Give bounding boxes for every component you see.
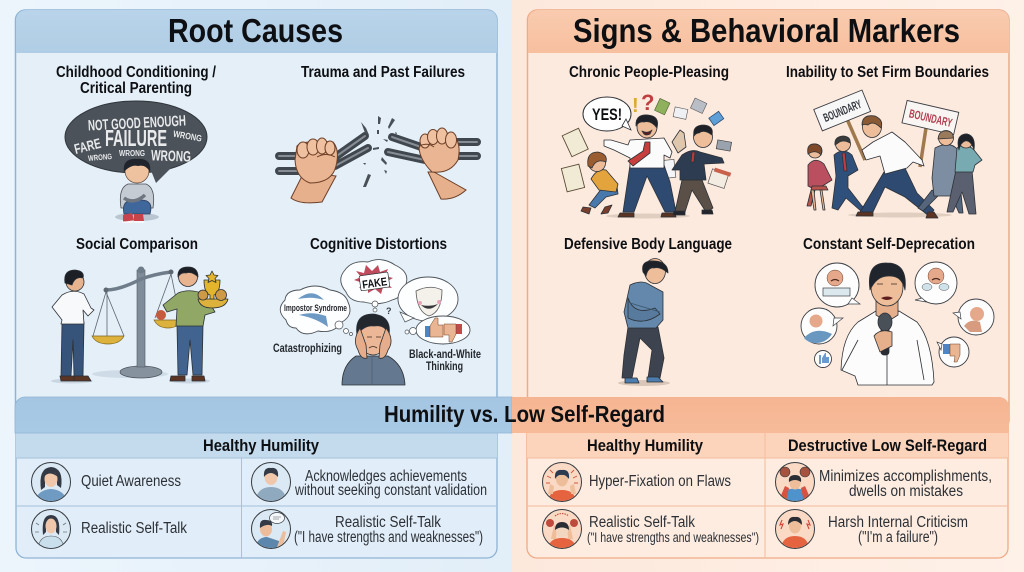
- icon: stressed man: [542, 462, 582, 502]
- speech bubble: yes: [583, 97, 631, 131]
- label: black-and-white thinking: Thinking: [426, 359, 463, 373]
- icon: dark speech bubble of negative words: WRONG: [119, 149, 145, 158]
- label: catastrophizing: Catastrophizing: [273, 341, 342, 355]
- icon: man calm: [252, 462, 290, 502]
- text: minimizes accomplishments: dwells on mistakes: [849, 483, 963, 500]
- block: chronic people-pleasing: [561, 64, 732, 218]
- main man pushing signs: [848, 116, 952, 218]
- speech bubbles with faces: [801, 262, 994, 368]
- icon: hunched man with crossed arms: [618, 258, 670, 386]
- icon: distressed person holding head: [542, 510, 582, 549]
- column heading: destructive low self-regard: Destructive Low Self-Regard: [788, 436, 987, 455]
- text: realistic self-talk peach: [587, 514, 759, 545]
- sign: boundary right: [902, 100, 959, 167]
- left fist: [291, 138, 337, 203]
- icon: person under dark clouds: [776, 462, 814, 502]
- sign: boundary left: BOUNDARY: [821, 97, 864, 125]
- signs header band: [528, 10, 1009, 53]
- man in blue suit: [832, 136, 868, 212]
- flying papers and symbols: [561, 90, 732, 192]
- sign: boundary right: BOUNDARY: [908, 106, 954, 130]
- text: realistic self-talk peach: Realistic Self-Talk: [589, 514, 695, 531]
- text: hyper-fixation on flaws: Hyper-Fixation on Flaws: [589, 473, 731, 490]
- subheading: childhood conditioning: [56, 64, 216, 97]
- icon: man with speech bubble: [252, 510, 290, 549]
- subheading: trauma: Trauma and Past Failures: [301, 64, 465, 81]
- block: defensive body language: [564, 236, 732, 386]
- text: harsh internal criticism: ("I'm a failure"): [858, 529, 938, 546]
- row: minimizes accomplishments: [776, 462, 992, 502]
- subheading: cognitive distortions: Cognitive Distortions: [310, 236, 447, 253]
- icon: man with trophy: [163, 267, 228, 384]
- subheading: inability to set firm boundaries: Inability to Set Firm Boundaries: [786, 64, 989, 81]
- root causes header band: [16, 10, 497, 53]
- heading: humility vs low self-regard: Humility vs. Low Self-Regard: [384, 401, 665, 427]
- row: hyper-fixation on flaws: [542, 462, 731, 502]
- block: childhood conditioning: [56, 64, 216, 222]
- text: harsh internal criticism: [828, 514, 968, 546]
- subheading: childhood conditioning: Critical Parenting: [80, 80, 192, 97]
- comparison table: humility vs low self-regard: [15, 397, 1009, 558]
- sign: boundary left: [814, 90, 871, 160]
- thought cloud: fake: FAKE: [362, 276, 388, 292]
- icon: dark speech bubble of negative words: FAILURE: [105, 125, 167, 151]
- icon: dark speech bubble of negative words: WRONG: [172, 129, 203, 144]
- text: realistic self-talk peach: ("I have strengths and weaknesses"): [587, 529, 759, 545]
- subheading: constant self-deprecation: Constant Self-Deprecation: [803, 236, 975, 253]
- table body left: [16, 433, 497, 558]
- icon: man looking at scale: [51, 270, 94, 384]
- icon: woman thinking: [32, 510, 70, 549]
- column heading: healthy humility right: Healthy Humility: [587, 436, 703, 455]
- column heading: healthy humility left: Healthy Humility: [203, 436, 319, 455]
- text: strengths and weaknesses: Realistic Self-Talk: [335, 514, 441, 531]
- thought bubble: thumbs up and down: [386, 306, 470, 344]
- panel: signs and behavioral markers: [528, 10, 1009, 430]
- heading: signs and behavioral markers: Signs & Behavioral Markers: [573, 12, 960, 49]
- icon: person with harsh thoughts: [776, 510, 814, 549]
- text: acknowledges achievements: without seeking constant validation: [294, 482, 487, 499]
- thought cloud: impostor syndrome: [280, 286, 352, 336]
- icon: man speaking into microphone: [841, 263, 934, 385]
- text: minimizes accomplishments: Minimizes accomplishments,: [819, 468, 992, 485]
- icon: dark speech bubble of negative words: WRONG: [151, 147, 191, 166]
- table body right: [527, 433, 1008, 558]
- text: strengths and weaknesses: [294, 514, 483, 546]
- thought cloud: theatre mask: [398, 277, 458, 322]
- text: harsh internal criticism: Harsh Internal Criticism: [828, 514, 968, 531]
- text: realistic self-talk: Realistic Self-Talk: [81, 520, 187, 537]
- row: realistic self-talk: [32, 510, 187, 549]
- icon: balance scale: [92, 266, 182, 378]
- woman carrying clipboards: [581, 152, 618, 214]
- speech bubble: yes: YES!: [592, 105, 622, 124]
- flying papers and symbols: ?: [641, 90, 654, 115]
- subheading: social comparison: Social Comparison: [76, 236, 198, 253]
- icon: dark speech bubble of negative words: FARE: [72, 135, 103, 157]
- row: strengths and weaknesses: [252, 510, 483, 549]
- text: minimizes accomplishments: [819, 468, 992, 500]
- row: quiet awareness: [32, 462, 181, 502]
- icon: sad boy hugging knees: [115, 159, 159, 222]
- row: acknowledges achievements: [252, 462, 487, 502]
- label: black-and-white thinking: [409, 347, 481, 373]
- block: inability to set firm boundaries: [786, 64, 989, 218]
- text: strengths and weaknesses: ("I have strengths and weaknesses"): [294, 529, 483, 546]
- icon: breaking chain in two fists: [279, 116, 477, 203]
- heading: root causes: Root Causes: [168, 12, 343, 49]
- icon: dark speech bubble of negative words: NOT GOOD ENOUGH: [88, 112, 186, 135]
- text: quiet awareness: Quiet Awareness: [81, 473, 181, 490]
- subheading: chronic people-pleasing: Chronic People-Pleasing: [569, 64, 729, 81]
- icon: dark speech bubble of negative words: [65, 101, 207, 183]
- icon: woman calm: [32, 462, 70, 502]
- right fist: [419, 128, 466, 199]
- text: acknowledges achievements: [294, 468, 487, 499]
- band: section title: [15, 397, 1009, 433]
- panel: root causes: [16, 10, 497, 430]
- block: cognitive distortions: [273, 236, 481, 385]
- subheading: childhood conditioning: Childhood Conditioning /: [56, 64, 216, 81]
- row: harsh internal criticism: [776, 510, 968, 549]
- subheading: defensive body language: Defensive Body Language: [564, 236, 732, 253]
- thought bubble: thumbs up and down: ?: [386, 306, 392, 316]
- right pair of people recoiling: [918, 130, 982, 214]
- woman in red suit: [807, 144, 832, 210]
- text: acknowledges achievements: Acknowledges achievements: [305, 468, 467, 485]
- flying papers and symbols: !: [632, 95, 639, 117]
- block: trauma and past failures: [279, 64, 477, 203]
- block: constant self-deprecation: [801, 236, 994, 385]
- right man in suit: [672, 125, 724, 215]
- row: realistic self-talk peach: [542, 510, 759, 549]
- icon: dark speech bubble of negative words: WRONG: [88, 152, 112, 163]
- label: black-and-white thinking: Black-and-White: [409, 347, 481, 361]
- main man overwhelmed: [604, 115, 690, 218]
- thought cloud: fake: [341, 260, 407, 312]
- icon: anxious man holding head: [342, 314, 405, 385]
- thought cloud: impostor syndrome: Impostor Syndrome: [284, 303, 347, 313]
- block: social comparison: [51, 236, 228, 384]
